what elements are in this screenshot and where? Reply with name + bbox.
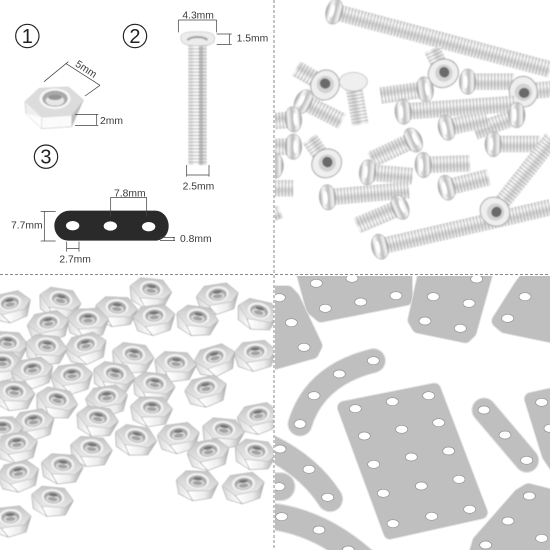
dimension: 4.3mm: 4.3mm xyxy=(182,10,214,21)
dimension: 5mm: 5mm xyxy=(73,59,98,81)
dimension: 2.5mm: 2.5mm xyxy=(183,181,214,192)
panel: photo of screws xyxy=(267,0,550,261)
dimension: 1.5mm xyxy=(217,34,268,45)
plate: small left fragment xyxy=(262,483,285,491)
panel: photo of hex nuts xyxy=(0,276,282,538)
plate: bottom right xyxy=(474,490,550,550)
plate: straight three-hole xyxy=(478,406,533,464)
dimension: 2mm xyxy=(75,114,123,127)
plate: top right xyxy=(498,268,550,338)
icon: screw xyxy=(181,32,215,165)
plate: bottom left arc xyxy=(265,513,365,550)
dimension: 0.8mm: 0.8mm xyxy=(180,234,212,245)
number 1: 1 xyxy=(22,26,33,48)
dimension: 4.3mm xyxy=(178,10,217,32)
number 3: 3 xyxy=(40,147,52,169)
number 2: 2 xyxy=(129,26,141,48)
dimension: 7.7mm: 7.7mm xyxy=(11,220,43,231)
dimension: 7.8mm: 7.8mm xyxy=(114,189,146,200)
panel: dimensions diagram xyxy=(11,10,268,266)
panel: photo of metal plates xyxy=(262,268,550,550)
dimension: 1.5mm: 1.5mm xyxy=(237,34,268,45)
dimension: 7.7mm xyxy=(11,211,56,241)
dimension: 2.5mm xyxy=(183,165,214,192)
plate: right edge xyxy=(531,392,550,475)
plate: lower left arc xyxy=(265,445,334,501)
plate: top left xyxy=(302,268,406,316)
dimension: 2.7mm xyxy=(59,242,91,266)
dimension: 0.8mm xyxy=(160,234,212,245)
plate: curved three-hole xyxy=(294,357,379,428)
dimension: 2.7mm: 2.7mm xyxy=(59,255,91,266)
number 1 xyxy=(16,24,39,48)
dimension: 5mm xyxy=(44,59,100,96)
number 3 xyxy=(34,145,58,169)
dimension: 2mm: 2mm xyxy=(100,116,123,127)
plate: large rectangular fifteen-hole xyxy=(344,390,481,533)
dimension: 7.8mm xyxy=(111,189,147,217)
plate: left xyxy=(265,292,316,366)
icon: hex nut xyxy=(25,87,83,129)
plate: top middle xyxy=(414,268,488,336)
number 2 xyxy=(123,24,147,48)
icon: black plate xyxy=(54,211,169,241)
